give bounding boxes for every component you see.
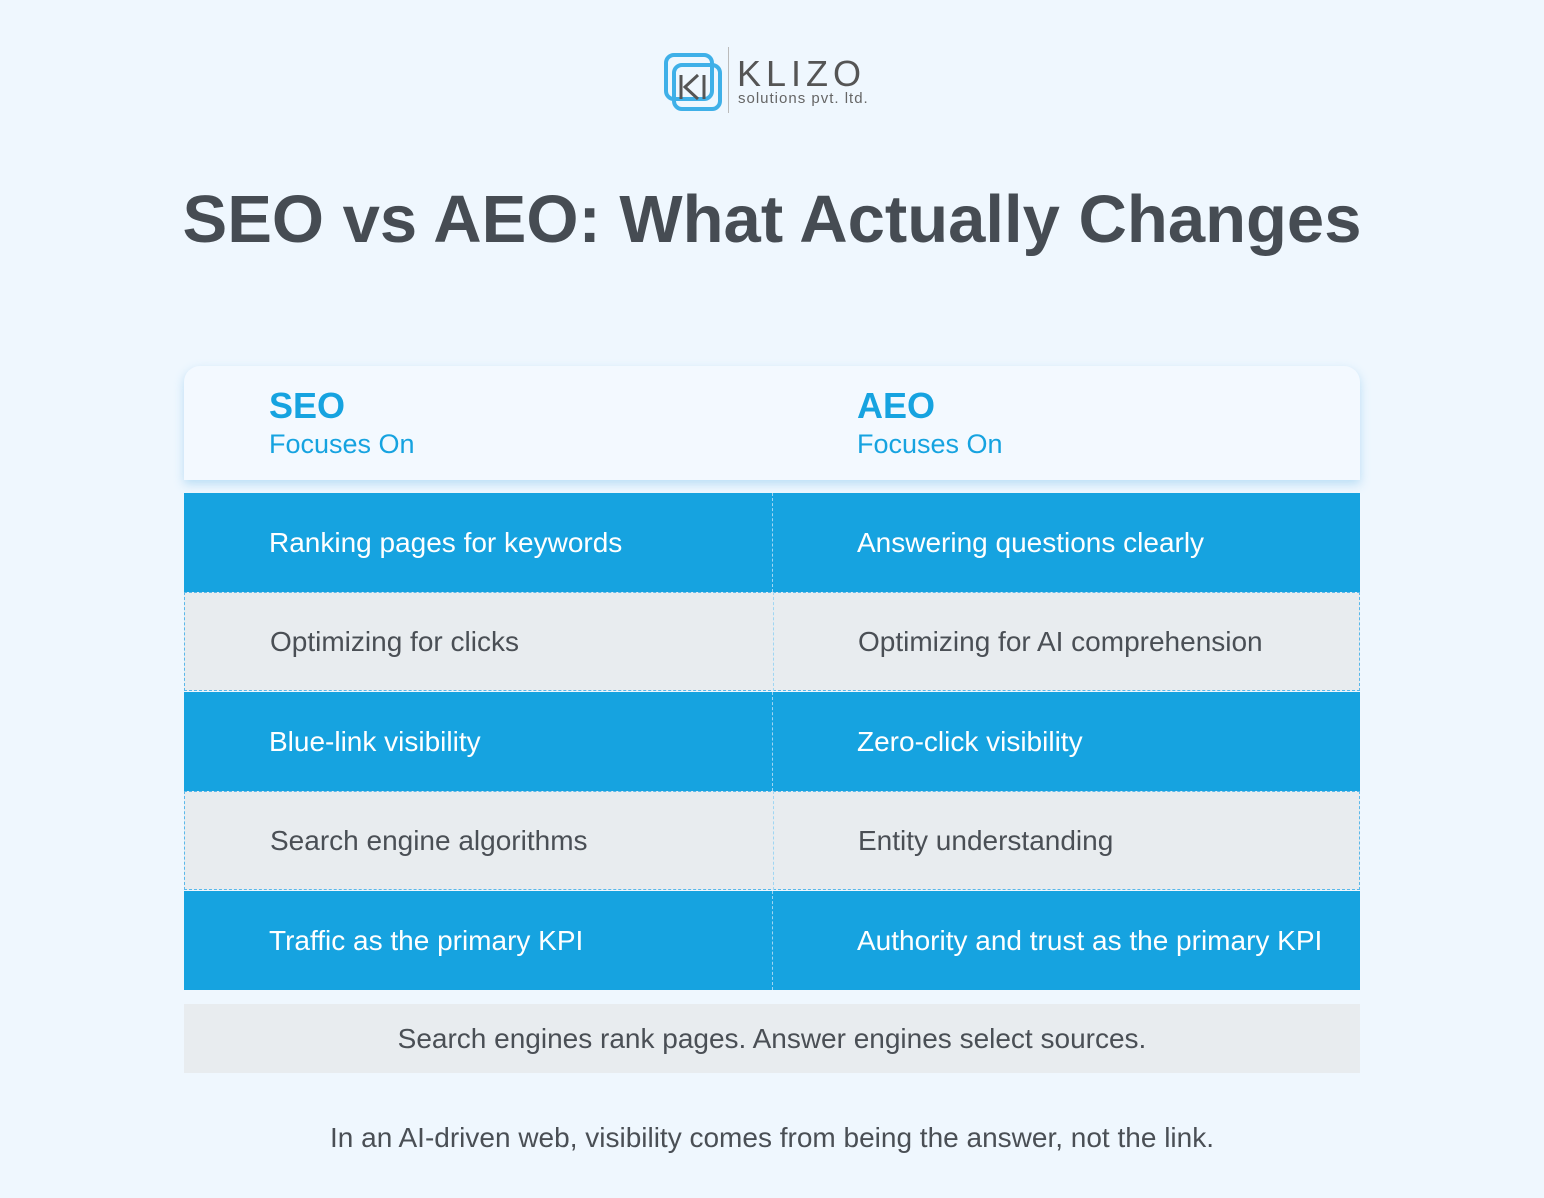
row 3: Zero-click visibility	[857, 726, 1083, 757]
row 5: Authority and trust as the primary KPI	[857, 925, 1322, 956]
logo	[664, 47, 869, 113]
row 1	[184, 493, 1360, 592]
heading: SEO: SEO	[269, 385, 345, 426]
icon: logo mark	[664, 53, 722, 111]
row 5: Traffic as the primary KPI	[269, 925, 583, 956]
summary band	[184, 1004, 1360, 1073]
row 4: Entity understanding	[858, 824, 1113, 856]
logo text: KLIZO	[737, 53, 866, 94]
title: SEO vs AEO: What Actually Changes	[183, 182, 1361, 257]
row 4	[184, 791, 1360, 890]
row 5	[184, 891, 1360, 990]
summary band: Search engines rank pages. Answer engines select sources.	[398, 1023, 1146, 1054]
row 4: Search engine algorithms	[270, 824, 588, 856]
heading: AEO: AEO	[857, 385, 935, 426]
row 2	[184, 592, 1360, 691]
heading: SEO	[269, 385, 415, 459]
panel: header card	[184, 366, 1360, 480]
footer text: In an AI-driven web, visibility comes from being the answer, not the link.	[330, 1122, 1214, 1153]
row 2: Optimizing for clicks	[270, 626, 519, 656]
logo: solutions pvt. ltd.	[738, 90, 869, 107]
row 3: Blue-link visibility	[269, 726, 481, 757]
heading: AEO: Focuses On	[857, 429, 1003, 459]
row 3	[184, 692, 1360, 791]
row 1: Ranking pages for keywords	[269, 527, 622, 558]
heading: AEO	[857, 385, 1003, 459]
row 1: Answering questions clearly	[857, 527, 1204, 558]
heading: SEO: Focuses On	[269, 429, 415, 459]
row 2: Optimizing for AI comprehension	[858, 626, 1263, 656]
